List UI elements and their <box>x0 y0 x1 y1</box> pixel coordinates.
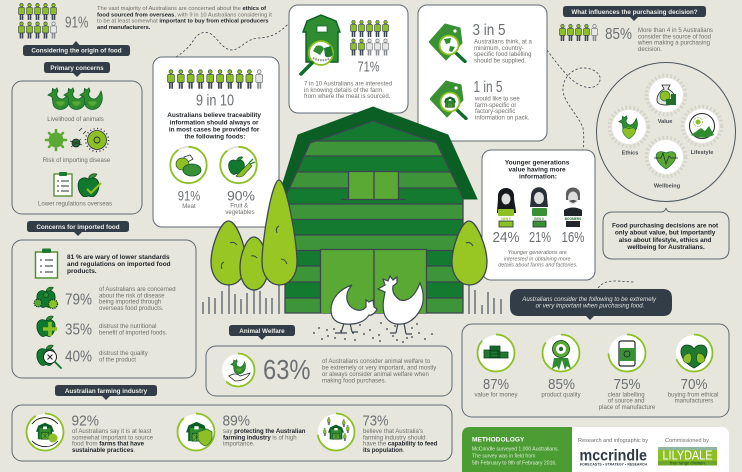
icon: tag with barn magnifier <box>430 81 466 118</box>
text: traceability statement: the following foods: <box>185 134 245 140</box>
callout: food purchasing decisions <box>603 208 729 259</box>
description: 7 in 10 Australians are interested <box>304 82 392 88</box>
description: somewhat important to source <box>72 435 154 441</box>
tree: tall <box>262 180 297 285</box>
heading: Younger generations <box>505 160 570 166</box>
tree: small middle <box>240 237 268 290</box>
dashed connector: labelling to younger generations <box>547 50 600 150</box>
stat: buying from ethical manufacturers <box>668 334 720 405</box>
panel: younger generations <box>482 150 595 280</box>
description: of Australians say it is at least <box>72 429 152 435</box>
figure: 9 in 10: 9 in 10 <box>196 92 234 110</box>
icon: can ring <box>608 334 646 372</box>
logo: lilydale: LILYDALE <box>662 448 712 462</box>
description: consider the source of food <box>638 34 711 40</box>
percentage 40: 40% <box>65 348 92 366</box>
description: distrust the nutritional <box>99 324 156 330</box>
barn window <box>341 172 406 200</box>
text: 81 percent wary: and regulations on imported food <box>67 261 171 268</box>
stat: clear labelling <box>599 334 656 411</box>
stat: 35 percent <box>37 316 168 338</box>
italic note: interested in obtaining more <box>504 256 571 262</box>
panel: 9 in 10 traceability <box>153 57 279 227</box>
label: livelihood of animals: Livelihood of animals <box>47 117 104 123</box>
label: research and infographic by: Research and infographic by <box>578 438 648 444</box>
icon: rosette ring <box>542 334 580 372</box>
methodology text: 5th February to 9th of February 2016. <box>472 460 557 466</box>
icon: people 9 of 10 <box>168 70 263 89</box>
panel: important purchase factors <box>462 324 729 417</box>
description: in knowing details of the farm <box>304 88 382 94</box>
label: ethics: Ethics <box>622 150 638 156</box>
diagram: purchasing factors circle <box>596 62 736 202</box>
panel: primary concerns <box>12 81 142 214</box>
callout: food purchasing decisions: Food purchasing decisions are not <box>612 222 719 230</box>
percentage 71: 71% <box>358 58 380 76</box>
intro text: food sourced from overseas, with 9 in 10 Australians considering it <box>97 12 272 18</box>
description: making food purchases. <box>322 378 387 384</box>
heading: considering the origin of food: Considering the origin of food <box>31 48 122 54</box>
tree: right <box>452 221 487 285</box>
description: farming industry should <box>363 435 426 441</box>
description: information on pack. <box>475 116 530 122</box>
description: specific food labelling <box>474 52 531 58</box>
description: when making a purchasing <box>637 41 710 47</box>
logo: mccrindle: mccrindle <box>580 448 647 464</box>
stat: 40 percent <box>37 345 149 368</box>
intro text: to be at least somewhat important to buy from ethical producers <box>97 19 269 25</box>
panel: 71 percent farm details <box>289 5 408 113</box>
label: lifestyle: Lifestyle <box>691 150 713 156</box>
stat: 79 percent <box>34 287 177 312</box>
percentages: 24% <box>492 229 520 246</box>
stat: 89 percent protecting <box>178 412 307 450</box>
percentage 70: 70% <box>680 376 708 393</box>
description: would like to see <box>474 96 520 102</box>
description: food from farms that have <box>72 442 144 448</box>
panel: labelling 3 in 5 and 1 in 5 <box>418 5 547 141</box>
description: distrust the quality <box>99 351 149 357</box>
intro text: The vast majority of Australians are concerned about the ethics of <box>97 6 266 12</box>
icon: clipboard <box>36 248 58 278</box>
percentage 89: 89% <box>222 412 250 430</box>
panel: australian farming industry <box>12 405 452 461</box>
description: importance. <box>223 442 255 448</box>
icon: ring with barn and shield <box>178 414 214 450</box>
icon: meat ring <box>170 147 207 183</box>
tree highlights <box>221 226 473 269</box>
illustration: seed dots <box>313 323 433 342</box>
text: 81 percent wary: products. <box>67 268 97 275</box>
stat: product quality <box>541 334 582 398</box>
icon: tag with globe magnifier <box>429 24 465 62</box>
percentages: 21% <box>529 229 551 246</box>
icon: ring with barn and people <box>318 414 354 450</box>
description: be extremely or very important, and mostly <box>322 366 437 372</box>
percentage 85: 85% <box>548 376 575 393</box>
heading: animal welfare: Animal Welfare <box>239 328 285 335</box>
dashed connector: younger generations to importance <box>598 281 635 288</box>
italic note: Younger generations are <box>508 250 567 256</box>
percentage 91: 91% <box>65 14 88 32</box>
description: benefit of imported foods. <box>99 330 168 336</box>
description: of Australians consider animal welfare to <box>322 359 431 365</box>
percentage 75: 75% <box>614 376 640 393</box>
heading: information: <box>519 174 557 180</box>
text: traceability statement: information should always or <box>170 119 259 126</box>
description: of the product <box>99 357 136 363</box>
callout: food purchasing decisions: also about lifestyle, ethics and <box>619 237 712 244</box>
stat: 85 percent source <box>560 24 715 53</box>
description: Australians think, at a <box>474 40 532 46</box>
description: being imported through <box>99 300 161 306</box>
heading: considering the origin of food <box>23 41 130 56</box>
percentage 87: 87% <box>483 376 509 393</box>
description: farm-specific or <box>475 103 516 109</box>
description: factory-specific <box>475 109 515 115</box>
logo: lilydale: free range chicken <box>670 460 705 466</box>
icon: apple with magnifier <box>37 345 61 368</box>
icon: heart leaves ring <box>676 334 712 372</box>
label: of source and <box>608 399 644 405</box>
text: traceability statement: in most cases be provided for <box>169 126 260 133</box>
description: from where the meat is sourced. <box>304 94 391 100</box>
description: or always consider animal welfare when <box>322 372 429 378</box>
footer: white credits panel <box>560 427 729 472</box>
label: clear labelling <box>608 392 645 398</box>
text: 81 percent wary: 81 % are wary of lower standards <box>67 254 170 261</box>
icon: gen X woman: GEN X <box>534 217 545 221</box>
description: decision. <box>638 47 662 53</box>
stat: 91% ethics of overseas food <box>18 3 273 38</box>
text: traceability statement: Australians believe traceability <box>167 112 261 119</box>
stat: 1 in 5 <box>430 79 530 122</box>
label: fruit and vegetables: vegetables <box>225 210 255 216</box>
panel: animal welfare <box>206 346 452 396</box>
label: place of manufacture <box>599 405 656 411</box>
percentages <box>492 229 584 246</box>
logo: mccrindle: FORECASTS • STRATEGY • RESEARCH <box>580 462 648 466</box>
callout: australians consider the following: Australians consider the following to be extremely <box>521 296 657 303</box>
description: More than 4 in 5 Australians <box>638 28 713 34</box>
label: product quality <box>541 392 582 398</box>
percentage 91: 91% <box>178 188 200 204</box>
methodology text: The survey was in field from <box>472 454 535 460</box>
description: about the risk of disease <box>99 293 165 299</box>
icon: ring with barn and arrows <box>26 414 64 450</box>
description: have the capability to feed <box>363 442 437 448</box>
label: risk of importing disease: Risk of importing disease <box>43 158 111 164</box>
stat: 3 in 5 <box>429 22 534 64</box>
percentage 92: 92% <box>72 412 99 430</box>
heading: primary concerns <box>44 62 110 77</box>
illustration: grass and tree trunks <box>203 280 501 314</box>
label: lower regulations overseas: Lower regulations overseas <box>38 202 112 208</box>
percentage 73: 73% <box>362 412 388 430</box>
dashed connector: ethics to traceability <box>176 23 289 57</box>
label: value: Value <box>658 119 672 125</box>
methodology text: McCrindle surveyed 1,000 Australians. <box>472 446 559 452</box>
heading: primary concerns: Primary concerns <box>50 65 104 72</box>
footer: methodology panel <box>462 427 572 472</box>
icon: three chickens <box>48 88 102 109</box>
description: sustainable practices. <box>72 448 135 454</box>
icon: coins ring <box>478 334 514 372</box>
stat: 73 percent capability <box>318 412 439 454</box>
barn door <box>320 250 426 313</box>
heading: value having more <box>509 166 566 174</box>
callout: food purchasing decisions: wellbeing for Australians. <box>626 244 705 251</box>
heading: animal welfare <box>229 325 295 340</box>
icon: clipboard and apple <box>54 172 101 197</box>
percentage 35: 35% <box>65 322 92 338</box>
label: value for money <box>474 392 518 398</box>
heading: australian farming industry <box>55 385 157 400</box>
logo: lilydale <box>658 447 717 466</box>
icon: apple with gears <box>34 287 58 308</box>
heading: methodology: METHODOLOGY <box>472 436 525 444</box>
icon: people 9 of 10 <box>18 3 56 38</box>
callout: food purchasing decisions: only about value, but importantly <box>615 230 716 237</box>
illustration: left chicken <box>331 285 377 333</box>
description: farming industry is of high <box>223 435 297 441</box>
percentage 90: 90% <box>227 188 255 204</box>
icon: barn under magnifier <box>301 15 340 74</box>
stat: value for money <box>474 334 518 398</box>
description: of Australians are concerned <box>99 287 176 293</box>
stat: meat 91 percent <box>170 147 207 210</box>
tree: small left <box>211 221 246 285</box>
illustration: right chicken <box>378 276 423 334</box>
barn roof <box>278 107 477 199</box>
description: say protecting the Australian <box>223 429 305 435</box>
heading: what influences the purchasing decision <box>563 6 706 21</box>
callout: australians consider the following: or very important when purchasing food. <box>536 302 644 310</box>
figure: 3 in 5: 3 in 5 <box>472 22 506 39</box>
description: minimum, country- <box>474 46 524 52</box>
heading: concerns for imported food: Concerns for imported food <box>36 224 120 231</box>
icon: gen Y woman: GEN Y <box>501 217 512 221</box>
barn body stripes <box>285 121 463 313</box>
label: wellbeing: Wellbeing <box>654 184 681 190</box>
heading: concerns for imported food <box>27 221 129 236</box>
stat: fruit and vegetables 90 percent <box>220 147 257 216</box>
heading: australian farming industry: Australian farming industry <box>65 388 148 395</box>
icon: disease microbes <box>46 128 108 152</box>
label: meat: Meat <box>182 204 196 210</box>
description: should be supplied. <box>474 58 526 64</box>
description: overseas food products. <box>99 306 164 312</box>
italic note: details about farms and factories. <box>498 263 578 269</box>
percentage 63: 63% <box>263 354 310 385</box>
intro text: and manufacturers. <box>97 25 151 31</box>
icon: people 4 of 5 <box>560 24 598 41</box>
percentage 79: 79% <box>65 292 92 308</box>
icon: fruit ring <box>220 147 257 183</box>
icon: boomer man: BOOMERS <box>565 217 581 221</box>
illustration: barn <box>278 107 477 313</box>
figure: 1 in 5: 1 in 5 <box>474 79 503 96</box>
description: believe that Australia's <box>363 429 423 435</box>
stat: 92 percent sustainable <box>26 412 155 454</box>
icon: ring with hen in hand <box>222 354 254 386</box>
panel: concerns for imported food <box>12 240 196 378</box>
description: its population. <box>363 448 404 454</box>
heading: what influences the purchasing decision: What influences the purchasing decision? <box>571 9 698 16</box>
label: commissioned by: Commissioned by <box>665 438 709 444</box>
percentage 85: 85% <box>605 26 632 43</box>
label: manufacturers <box>675 399 713 405</box>
icon: people 7 of 10 <box>350 20 388 55</box>
percentages: 16% <box>562 229 584 246</box>
label: buying from ethical <box>668 392 719 398</box>
label: fruit and vegetables: Fruit & <box>230 204 248 210</box>
icon: apple with plus <box>37 316 57 336</box>
callout: australians consider the following <box>510 289 672 320</box>
